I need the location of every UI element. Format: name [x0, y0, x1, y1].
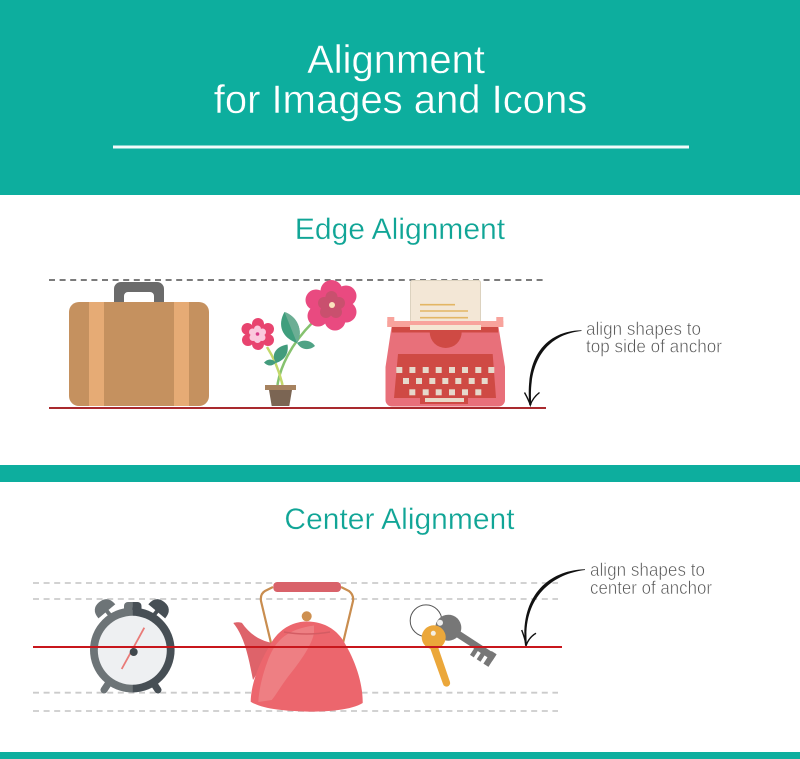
icon: potted flower: [242, 280, 356, 406]
arrow: edge annotation: [524, 330, 582, 405]
panel: edge alignment illustration: [49, 280, 722, 409]
center anchor line: [33, 646, 562, 648]
callout: edge annotation: [586, 319, 722, 356]
icon: kettle: [233, 582, 363, 712]
title: [214, 38, 587, 122]
title: for Images and Icons: [214, 78, 587, 122]
icon: typewriter: [386, 280, 505, 406]
arrow: center annotation: [522, 569, 585, 646]
title: Alignment: [307, 38, 485, 82]
icon: suitcase: [69, 282, 209, 406]
panel: center alignment illustration: [33, 560, 712, 712]
header banner: [0, 0, 800, 195]
heading: center alignment: Center Alignment: [284, 503, 515, 536]
header underline: [113, 146, 689, 148]
callout: edge annotation: align shapes to: [586, 319, 701, 339]
callout: center annotation: [590, 560, 712, 598]
icon: alarm clock: [90, 595, 175, 692]
top guide line: [49, 279, 545, 281]
baseline anchor line: [49, 407, 546, 409]
callout: center annotation: center of anchor: [590, 578, 712, 598]
bottom band: [0, 752, 800, 759]
callout: center annotation: align shapes to: [590, 560, 705, 580]
heading: edge alignment: Edge Alignment: [295, 213, 506, 246]
guide lines: [33, 583, 558, 711]
icon: keys: [410, 605, 502, 687]
callout: edge annotation: top side of anchor: [586, 336, 722, 356]
divider band: [0, 465, 800, 482]
